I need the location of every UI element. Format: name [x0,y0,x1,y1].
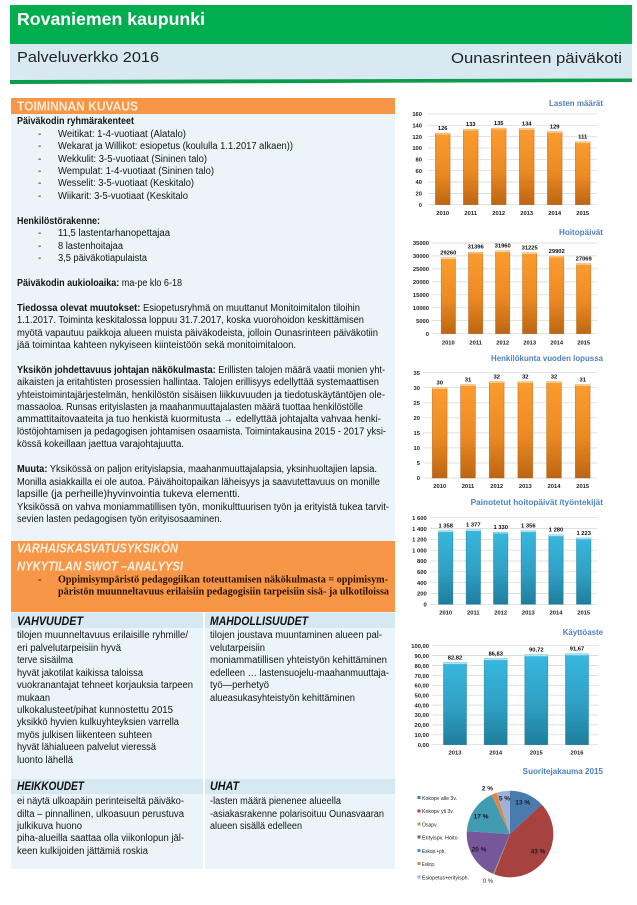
heading: vahvuudet: VAHVUUDET [17,614,84,628]
panel: mahdollisuudet [205,612,395,779]
bar chart: Käyttöaste: 86,83 [488,652,504,658]
bar chart: Henkilökunta vuoden lopussa: 2010 [433,484,446,490]
bar chart: Painotetut hoitopäivät / työntekijät: 600 [417,570,427,576]
bar chart: Henkilökunta vuoden lopussa: 2014 [548,484,561,490]
text block: mahdollisuudet list [210,630,389,704]
text block: heikkoudet list: dilta – pinnallinen, ulkoasuun perustuva [17,809,184,820]
bar chart: Henkilökunta vuoden lopussa: 10 [414,446,420,452]
text block: vahvuudet list: hyvät jakotilat kaikissa taloissa [17,668,143,679]
bar chart: Henkilökunta vuoden lopussa: 15 [414,431,421,437]
subtitle band: Ounasrinteen päiväkoti [451,50,622,67]
bar chart: Hoitopäivät: 15000 [413,293,429,299]
pie legend: Erityispv. Hoito [422,836,458,842]
text block: muuta: lapsille (ja perheille)hyvinvointia tukeva elementti. [17,489,240,500]
bar chart: Hoitopäivät: 29260 [440,250,456,256]
panel: swot heading [11,540,395,612]
bar chart: Painotetut hoitopäivät / työntekijät: 2010 [439,610,452,616]
text block: tiedossa olevat muutokset: 1.1.2017. Toiminta keskitalossa loppuu 31.7.2017, koska vuorohoidon keskittämisen [17,315,364,326]
bar chart: Painotetut hoitopäivät / työntekijät: 1 223 [576,531,592,537]
bar chart: Käyttöaste: 0,00 [418,743,429,749]
bar chart: Hoitopäivät: 27069 [576,256,593,262]
bar chart: Lasten määrät: 2012 [492,211,505,217]
bar chart: Lasten määrät: 2011 [464,211,478,217]
bar chart: Henkilökunta vuoden lopussa: 30 [414,386,420,392]
text block: ryhmärakenteet: Wiikarit: 3-5-vuotiaat (Keskitalo [58,191,188,202]
bar chart: Painotetut hoitopäivät / työntekijät: 0 [423,602,427,608]
text block: heikkoudet list [16,796,184,857]
bar chart: Lasten määrät: 120 [412,135,422,141]
bar chart: Lasten määrät: 2010 [436,211,449,217]
bar chart: Painotetut hoitopäivät / työntekijät: 2013 [522,610,536,616]
text block: ryhmärakenteet: - [38,154,41,165]
heading: varhaiskasvatusyksikön swot: VARHAISKASVATUSYKSIKÖN [17,540,179,556]
text block: uhat list: alueen sisällä edelleen [210,821,302,832]
text block: henkilöstörakenne: - [38,228,41,239]
pie labels: 2 % [482,786,493,792]
bar chart: Lasten määrät: 126 [438,126,448,132]
bar chart: Käyttöaste: 80,00 [414,664,429,670]
text block: henkilöstörakenne: 3,5 päiväkotiapulaista [58,253,147,264]
bar chart: Lasten määrät: 129 [550,124,560,130]
text block: ryhmärakenteet: - [38,141,41,152]
bar chart: Käyttöaste: 40,00 [414,704,429,710]
text block: uhat list: -asiakasrakenne polarisoituu Ounasvaaran [210,809,384,820]
bar chart: Henkilökunta vuoden lopussa: 0 [417,476,420,482]
bar chart: Painotetut hoitopäivät / työntekijät: 2014 [550,610,563,616]
pie slices [467,791,553,877]
text block: yksikön johdettavuus [17,365,386,450]
bar chart: Henkilökunta vuoden lopussa: 2013 [519,484,533,490]
bar chart: Hoitopäivät: 10000 [413,306,429,312]
bar chart: Käyttöaste: 2014 [489,750,503,756]
bar chart: Lasten määrät: 134 [522,122,532,128]
bar chart: Hoitopäivät: 25000 [413,267,429,273]
bar chart: Painotetut hoitopäivät / työntekijät: 1 377 [466,522,481,528]
bar chart: Henkilökunta vuoden lopussa: 5 [417,461,421,467]
bar chart: Painotetut hoitopäivät / työntekijät: 1 356 [521,524,536,530]
text block: muuta [17,464,389,525]
pie chart: Suoritejakauma 2015: Suoritejakauma 2015 [523,767,604,776]
bar chart: Hoitopäivät: 2013 [523,340,537,346]
heading: toiminnan kuvaus: TOIMINNAN KUVAUS [17,100,138,114]
bar chart: Lasten määrät: 60 [416,169,422,175]
text block: henkilöstörakenne: Henkilöstörakenne: [17,216,100,227]
bar chart: Käyttöaste: 90,72 [529,648,544,654]
heading: toiminnan kuvaus [11,98,395,114]
bar chart: Henkilökunta vuoden lopussa: 2015 [576,484,590,490]
bar chart: Henkilökunta vuoden lopussa: Henkilökunta vuoden lopussa [491,354,604,363]
bar chart: Painotetut hoitopäivät / työntekijät: 1 330 [493,525,508,531]
text block: muuta: sevien lasten pedagogisen työn erityisosaaminen. [17,514,222,525]
text block: ryhmärakenteet: Weitikat: 1-4-vuotiaat (Alatalo) [58,129,186,140]
bar chart: Henkilökunta vuoden lopussa: 2012 [490,484,503,490]
text block: mahdollisuudet list: velutarpeisiin [210,643,265,654]
bar chart: Lasten määrät: 2015 [576,211,590,217]
text block: aukioloaika: Päiväkodin aukioloaika: ma-pe klo 6-18 [17,278,182,289]
text block: mahdollisuudet list: alueasukasyhteistyön kehittäminen [210,693,355,704]
bar chart: Lasten määrät: 111 [578,134,588,140]
subtitle band [10,44,632,84]
pie labels: 43 % [531,848,546,856]
bar chart: Lasten määrät: Lasten määrät [549,99,603,108]
text block: henkilöstörakenne: - [38,241,41,252]
header banner [10,5,632,84]
bar chart: Hoitopäivät: 35000 [413,241,429,247]
bar chart: Hoitopäivät [413,228,603,346]
text block: heikkoudet list: julkikuva huono [16,821,82,832]
text block: muuta: Yksikössä on vahva moniammatillisen työn, monikulttuurisen työn ja erityistä tukea tarvit- [17,502,389,513]
text block: heikkoudet list: ei näytä ulkoapäin perinteiseltä päiväko- [17,796,184,807]
bar chart: Lasten määrät: 20 [416,192,422,198]
text block: mahdollisuudet list: edelleen … lastensuojelu-maahanmuuttaja- [210,668,389,679]
text block: mahdollisuudet list: moniammatillisen yhteistyön kehittäminen [210,655,387,666]
text block: mahdollisuudet list: työ—perhetyö [210,680,269,691]
bar chart: Henkilökunta vuoden lopussa: 35 [414,371,421,377]
bar chart: Hoitopäivät: 5000 [416,319,429,325]
bar chart: Hoitopäivät: Hoitopäivät [559,228,603,237]
bar chart: Henkilökunta vuoden lopussa: 32 [522,374,529,380]
text block: tiedossa olevat muutokset [16,303,378,351]
bar chart: Painotetut hoitopäivät / työntekijät: 2015 [577,610,591,616]
heading: uhat: UHAT [210,779,240,793]
text block: heikkoudet list: keen kulkijoiden jättämiä roskia [17,846,148,857]
pie legend: Kokopv yli 3v. [422,809,454,815]
bar chart: Käyttöaste: 20,00 [414,723,429,729]
text block: vahvuudet list: hyvät lähialueen palvelut vieressä [17,742,156,753]
text block: vahvuudet list: ulkokalusteet/pihat kunnostettu 2015 [17,705,173,716]
text block: oppimisympäristö: Oppimisympäristö pedagogiikan toteuttamisen näkökulmasta = oppimisym- [58,574,388,586]
pie legend: Eskop.+ph. [422,849,446,855]
title: Rovaniemen kaupunki: Rovaniemen kaupunki [17,9,205,29]
bar chart: Käyttöaste: 30,00 [414,713,429,719]
text block: ryhmärakenteet: Wekkulit: 3-5-vuotiaat (Sininen talo) [58,154,207,165]
panel: vahvuudet [11,612,203,779]
bar chart: Lasten määrät: 100 [412,146,422,152]
bar chart: Käyttöaste [411,628,604,756]
text block: vahvuudet list: yksikkö hyvien kulkuyhteyksien varrella [17,717,179,728]
text block: vahvuudet list: mukaan [17,693,50,704]
heading: varhaiskasvatusyksikön swot [17,540,183,574]
bar chart: Henkilökunta vuoden lopussa: 25 [414,401,421,407]
bar chart: Hoitopäivät: 2010 [442,340,455,346]
pie labels: 13 % [515,800,530,806]
subtitle band: Palveluverkko 2016 [17,49,159,66]
text block: muuta: Muuta: Yksikössä on paljon erityislapsia, maahanmuuttajalapsia, yksinhuoltajien lapsia. [17,464,377,475]
heading: varhaiskasvatusyksikön swot: NYKYTILAN SWOT –ANALYYSI [17,558,183,574]
text block: uhat list: -lasten määrä pienenee alueella [210,796,341,807]
text block: vahvuudet list: terve sisäilma [17,655,73,666]
pie labels: 5 % [499,796,510,802]
text block: mahdollisuudet list: tilojen joustava muuntaminen alueen pal- [210,630,382,641]
text block: ryhmärakenteet: Wempulat: 1-4-vuotiaat (Sininen talo) [58,166,214,177]
bar chart: Painotetut hoitopäivät / työntekijät: 2011 [467,610,480,616]
bar chart: Painotetut hoitopäivät / työntekijät: 1 600 [412,516,427,522]
text block: vahvuudet list: tilojen muunneltavuus erilaisille ryhmille/ [17,630,188,641]
bar chart: Käyttöaste: 10,00 [414,733,429,739]
bar chart: Käyttöaste: Käyttöaste [563,628,604,637]
text block: ryhmärakenteet: - [38,129,41,140]
text block: vahvuudet list: vuokranantajat tehneet korjauksia tarpeen [17,680,193,691]
bar chart: Henkilökunta vuoden lopussa: 32 [493,374,500,380]
text block: yksikön johdettavuus: aikaisten ja eritahtisten prosessien hallintaa. Talojen erillisyys edellyttää systemaattisen [17,377,379,388]
panel: heikkoudet [11,779,203,869]
text block: heikkoudet list: piha-alueilla saattaa olla viikonlopun jäl- [17,833,184,844]
text block: vahvuudet list: myös julkisen liikenteen suhteen [17,730,152,741]
text block: henkilöstörakenne: - [38,253,41,264]
pie chart: Suoritejakauma 2015 [418,767,604,885]
text block: tiedossa olevat muutokset: Tiedossa olevat muutokset: Esiopetusryhmä on muuttanut Monitoimitalon tiloihin [17,303,360,314]
text block: henkilöstörakenne: 11,5 lastentarhanopettajaa [58,228,170,239]
bar chart: Käyttöaste: 50,00 [414,694,429,700]
bar chart: Lasten määrät: 140 [412,124,422,130]
text block: yksikön johdettavuus: kössä kokeillaan jaettua varajohtajuutta. [17,439,184,450]
bar chart: Painotetut hoitopäivät / työntekijät: 2012 [494,610,507,616]
pie legend: Osapv. [422,822,438,828]
bar chart: Henkilökunta vuoden lopussa: 32 [551,374,557,380]
bar chart: Käyttöaste: 70,00 [414,674,429,680]
bar chart: Käyttöaste: 2013 [449,750,462,756]
bar chart: Painotetut hoitopäivät / työntekijät [412,498,603,616]
bar chart: Painotetut hoitopäivät / työntekijät: 1 358 [438,524,454,530]
bar chart: Käyttöaste: 60,00 [414,684,429,690]
bar chart: Lasten määrät: 133 [466,122,476,128]
text block: uhat list [210,796,384,832]
bar chart: Painotetut hoitopäivät / työntekijät: 1 400 [412,527,427,533]
bar chart: Painotetut hoitopäivät / työntekijät: 800 [417,559,427,565]
heading: heikkoudet: HEIKKOUDET [17,779,85,793]
text block: ryhmärakenteet [17,116,293,202]
bar chart: Hoitopäivät: 2014 [550,340,564,346]
panel: uhat [205,779,395,869]
bar chart: Henkilökunta vuoden lopussa: 20 [414,416,420,422]
bar chart: Hoitopäivät: 2012 [496,340,509,346]
text block: yksikön johdettavuus: löstöjohtamisen ja pedagogisen johtamisen osaamista. Toimintakausina 2015 - 2017 yksi- [17,426,386,438]
bar chart: Hoitopäivät: 31396 [468,244,485,250]
bar chart: Hoitopäivät: 31960 [495,244,511,250]
bar chart: Käyttöaste: 2016 [571,750,584,756]
text block: yksikön johdettavuus: massaoloa. Runsas erityislasten ja maahanmuuttajalasten määrä tuottaa henkilöstölle [17,402,363,413]
bar chart: Lasten määrät: 40 [416,180,422,186]
bar chart: Lasten määrät: 2013 [520,211,534,217]
pie legend [418,796,469,882]
pie labels [472,786,546,885]
bar chart: Lasten määrät: 135 [494,121,504,127]
text block: henkilöstörakenne [17,216,170,264]
bar chart: Painotetut hoitopäivät / työntekijät: 1 280 [549,528,563,534]
pie labels: 20 % [472,846,487,854]
panel: toiminnan kuvaus [11,98,395,541]
pie legend: Esiopetus+erityisph. [422,876,469,882]
heading: mahdollisuudet: MAHDOLLISUUDET [210,614,309,628]
bar chart: Käyttöaste: 82,82 [448,656,462,662]
text block: henkilöstörakenne: 8 lastenhoitajaa [58,241,123,252]
bar chart: Hoitopäivät: 29902 [549,249,565,255]
bar chart: Hoitopäivät: 2015 [577,340,591,346]
text block: oppimisympäristö: päristön muunneltavuus erilaisiin pedagogisiin tarpeisiin sisä- ja ulkotiloissa [58,586,390,598]
text block: vahvuudet list [17,630,193,766]
bar chart: Painotetut hoitopäivät / työntekijät: Painotetut hoitopäivät /työntekijät [471,498,603,507]
bar chart: Hoitopäivät: 30000 [413,254,429,260]
bar chart: Lasten määrät: 160 [412,112,422,118]
bar chart: Hoitopäivät: 31225 [522,246,539,252]
text block: vahvuudet list: eri palvelutarpeisiin hyvä [17,643,121,654]
text block: ryhmärakenteet: - [38,166,41,177]
text block: yksikön johdettavuus: ammattitaitovaateita ja tuo henkistä kuormitusta → edellyttää johtajalta vahvaa henki- [17,414,381,425]
pie labels: 17 % [474,814,489,820]
text block: tiedossa olevat muutokset: myötä vapautuu paikkoja alueen muista päiväkodeista, jolloin Ounasrinteen päiväkotiin [17,328,378,339]
bar chart: Painotetut hoitopäivät / työntekijät: 200 [417,592,427,598]
text block: yksikön johdettavuus: yhteistoimintajärjestelmän, henkilöstön sisäisen liikkuvuuden ja tiedotuskäytäntöjen ole- [17,390,385,401]
bar chart: Henkilökunta vuoden lopussa: 2011 [462,484,475,490]
bar chart: Lasten määrät [412,99,603,217]
bar chart: Henkilökunta vuoden lopussa: 31 [465,378,472,384]
text block: ryhmärakenteet: Wesselit: 3-5-vuotiaat (Keskitalo) [58,178,194,189]
title: Rovaniemen kaupunki [10,5,632,44]
text block: oppimisympäristö: - [38,574,42,586]
bar chart: Lasten määrät: 80 [416,158,422,164]
text block: ryhmärakenteet: Wekarat ja Willikot: esiopetus (koululla 1.1.2017 alkaen)) [58,141,293,152]
text block: tiedossa olevat muutokset: jää toimintaa kahteen nykyiseen kiinteistöön sekä monitoimitaloon. [16,340,296,351]
bar chart: Painotetut hoitopäivät / työntekijät: 1 000 [412,548,427,554]
bar chart: Hoitopäivät: 0 [426,332,429,338]
pie legend: Kokopv alle 3v. [422,796,457,802]
text block: vahvuudet list: luonto lähellä [17,755,73,766]
bar chart: Henkilökunta vuoden lopussa [414,354,604,490]
bar chart: Painotetut hoitopäivät / työntekijät: 400 [417,581,427,587]
bar chart: Käyttöaste: 2015 [530,750,544,756]
pie legend: Eskop. [422,862,435,868]
bar chart: Käyttöaste: 91,67 [570,646,584,652]
text block: ryhmärakenteet: Päiväkodin ryhmärakenteet [17,116,135,127]
bar chart: Henkilökunta vuoden lopussa: 30 [436,380,443,386]
bar chart: Käyttöaste: 90,00 [414,654,429,660]
bar chart: Lasten määrät: 2014 [548,211,562,217]
bar chart: Henkilökunta vuoden lopussa: 31 [579,378,587,384]
bar chart: Lasten määrät: 0 [419,203,422,209]
bar chart: Painotetut hoitopäivät / työntekijät: 1 200 [412,538,427,544]
text block: ryhmärakenteet: - [38,191,41,202]
text block: muuta: Monilla asiakkailla ei ole autoa. Päivähoitopaikan läheisyys ja saavutettavuus on monille [17,477,380,488]
text block: oppimisympäristö [38,574,390,598]
bar chart: Käyttöaste: 100,00 [411,644,429,650]
bar chart: Hoitopäivät: 2011 [469,340,483,346]
text block: yksikön johdettavuus: Yksikön johdettavuus johtajan näkökulmasta: Erillisten talojen määrä vaatii monien yht- [17,365,385,376]
text block: ryhmärakenteet: - [38,178,41,189]
pie labels: 0 % [483,879,494,885]
bar chart: Hoitopäivät: 20000 [413,280,429,286]
